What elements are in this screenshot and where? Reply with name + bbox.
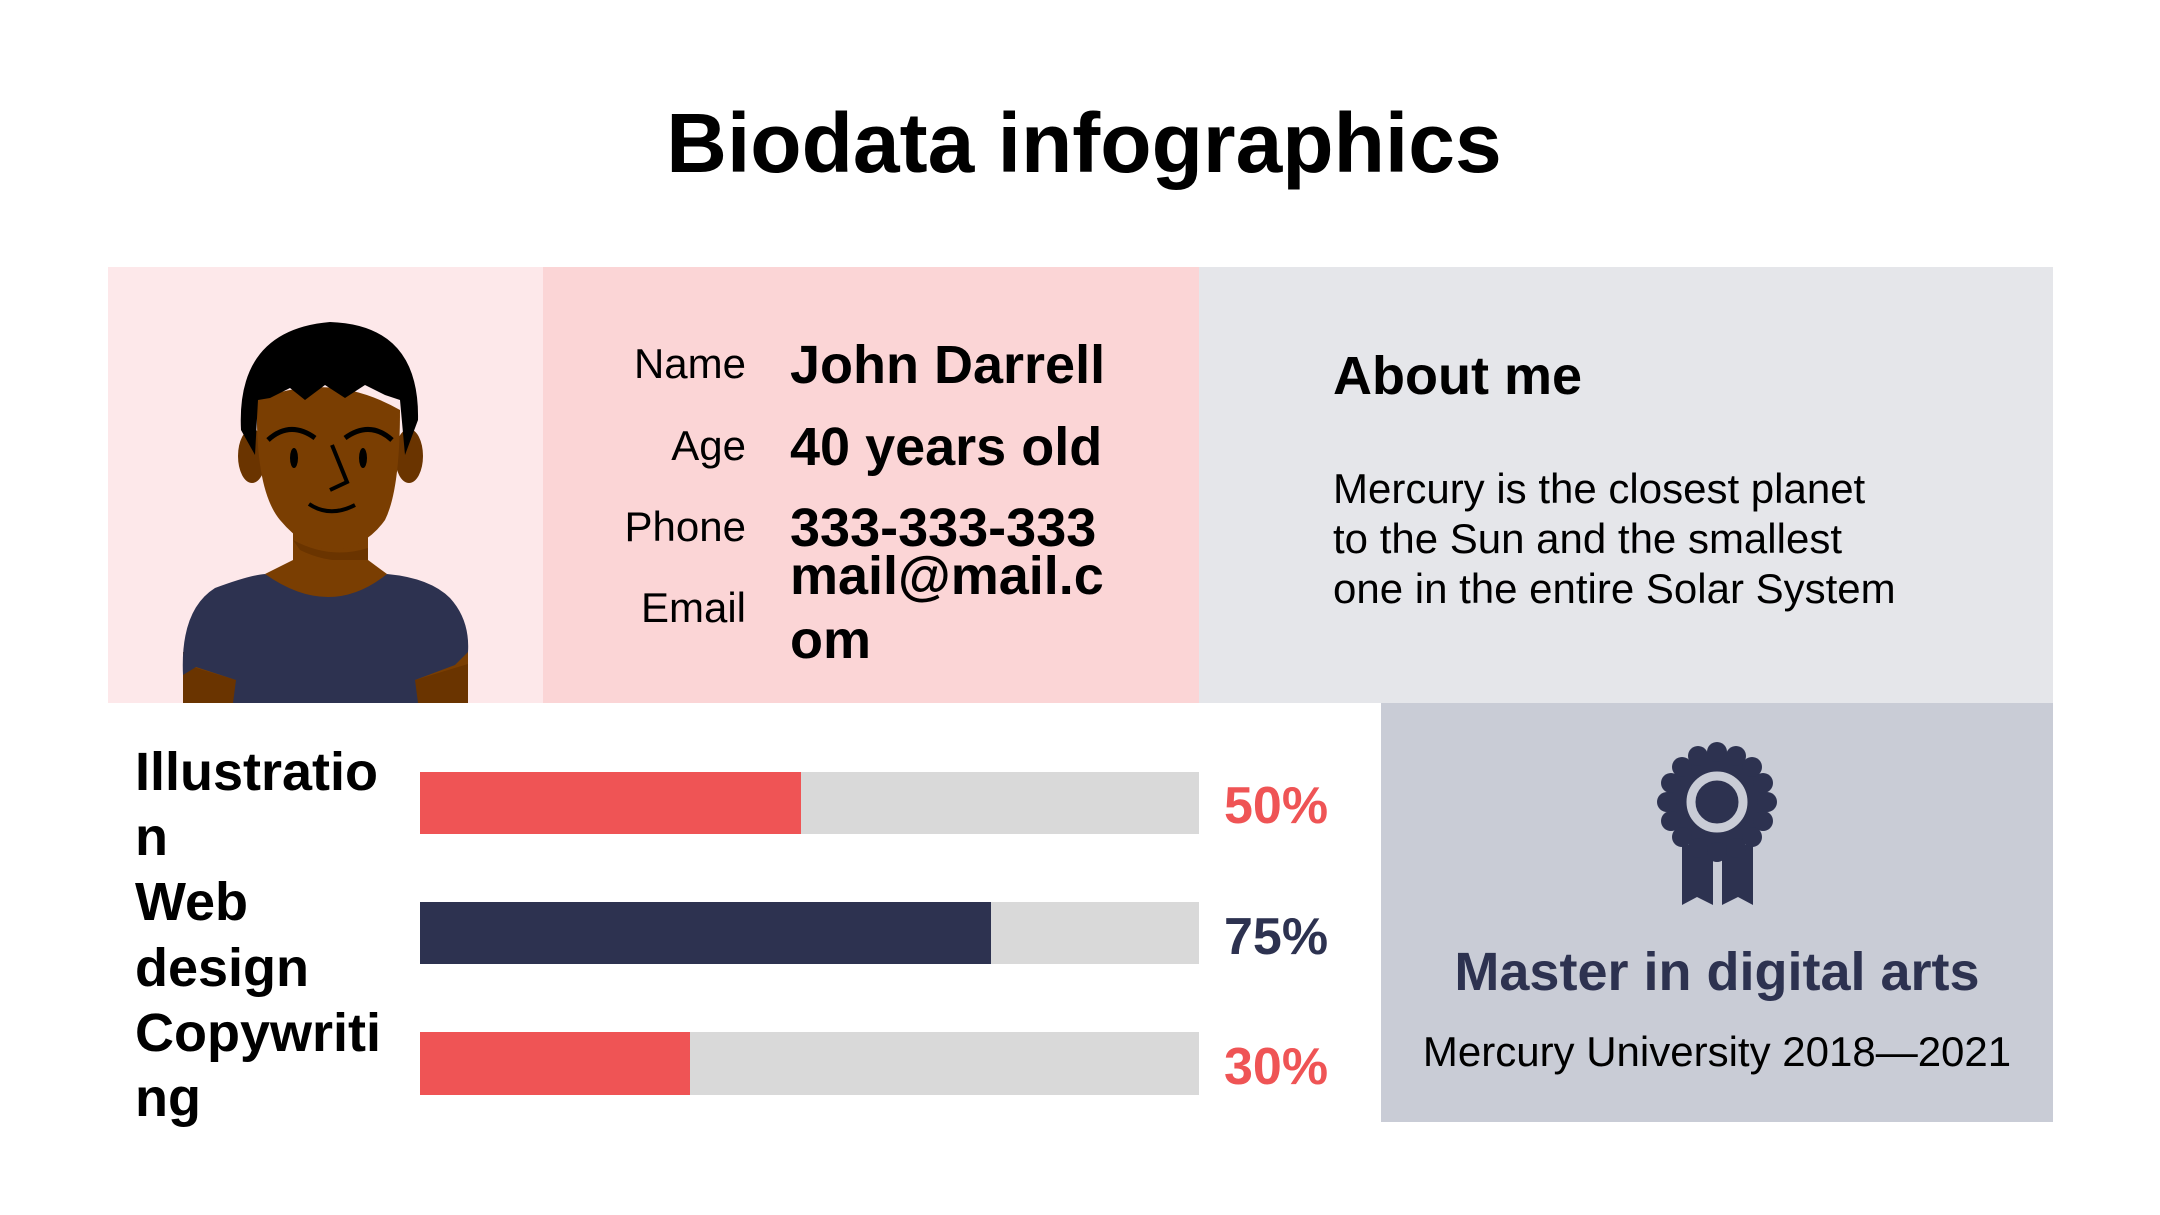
panel: skills: 50% — [1224, 777, 1328, 835]
panel: personal details: Name — [634, 340, 746, 387]
panel: skills — [135, 742, 1328, 1128]
panel: skills: Web — [135, 872, 248, 932]
bar chart — [420, 772, 1199, 1095]
panel: education: Mercury University 2018—2021 — [1423, 1028, 2011, 1075]
panel: personal details: mail@mail.c — [790, 546, 1104, 606]
panel: skills: ng — [135, 1068, 201, 1128]
panel: about me: one in the entire Solar System — [1333, 565, 1896, 612]
panel: photo — [108, 267, 543, 703]
panel: personal details: 333-333-333 — [790, 498, 1096, 558]
icon: avatar — [183, 322, 468, 703]
panel: skills: 75% — [1224, 908, 1328, 966]
panel: skills: n — [135, 807, 168, 867]
panel: about me: Mercury is the closest planet — [1333, 465, 1866, 512]
panel: personal details: Email — [641, 584, 746, 631]
panel: personal details: John Darrell — [790, 335, 1105, 395]
panel: skills: Illustratio — [135, 742, 378, 802]
title: Biodata infographics — [666, 96, 1502, 190]
panel: personal details: Phone — [625, 503, 746, 550]
panel: skills: Copywriti — [135, 1003, 381, 1063]
panel: education: Master in digital arts — [1454, 942, 1980, 1002]
panel: about me — [1199, 267, 2053, 703]
icon: award medal — [1657, 742, 1777, 905]
panel: personal details: 40 years old — [790, 417, 1102, 477]
panel: personal details: Age — [671, 422, 746, 469]
panel: skills: 30% — [1224, 1038, 1328, 1096]
panel: personal details: om — [790, 610, 871, 670]
panel: education — [1381, 703, 2053, 1122]
panel: skills: design — [135, 938, 309, 998]
panel: about me: to the Sun and the smallest — [1333, 515, 1842, 562]
panel: personal details — [543, 267, 1199, 703]
panel: about me: About me — [1333, 346, 1582, 406]
